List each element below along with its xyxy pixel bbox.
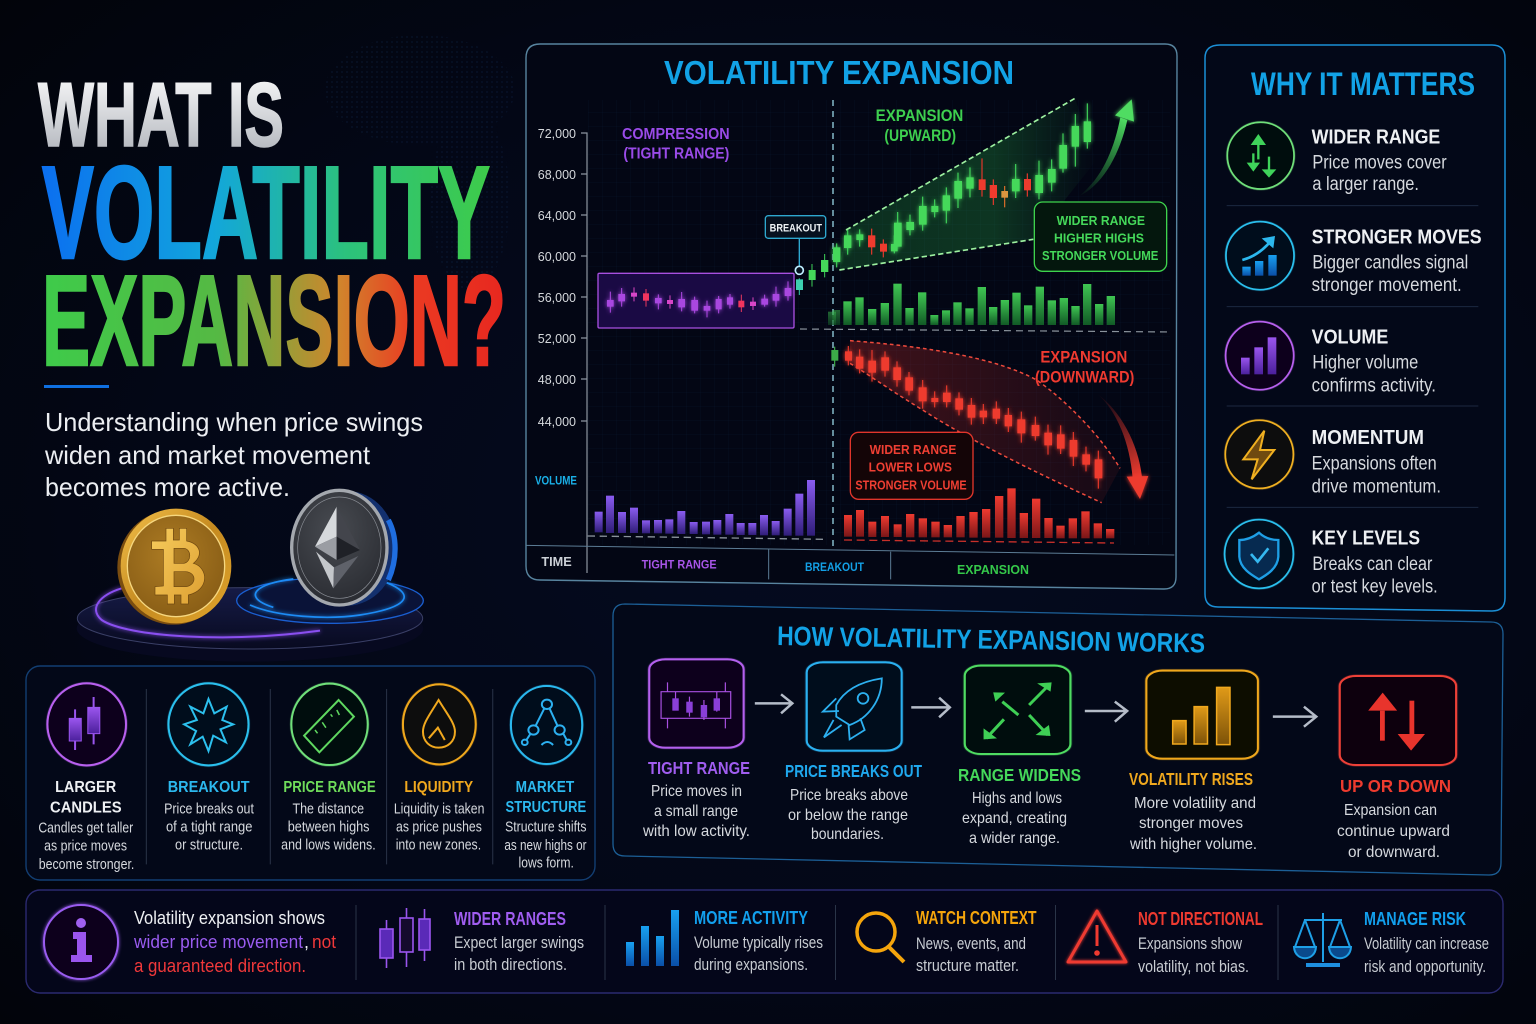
arrow: upward bbox=[1078, 99, 1134, 197]
arrow bbox=[755, 694, 792, 713]
callout: upward expansion: STRONGER VOLUME bbox=[1042, 248, 1158, 263]
price axis: 44,000 bbox=[538, 415, 576, 429]
expansion down label: (DOWNWARD) bbox=[1035, 369, 1134, 387]
item: wider range: Price moves cover bbox=[1312, 152, 1447, 173]
callout: upward expansion: WIDER RANGE bbox=[1057, 213, 1145, 228]
subtitle: becomes more active. bbox=[45, 472, 290, 502]
step 1 text: Price moves in bbox=[651, 783, 742, 800]
step 5 text bbox=[1337, 776, 1451, 861]
subtitle: Understanding when price swings bbox=[45, 407, 423, 437]
price axis bbox=[538, 127, 587, 573]
step 1 text: a small range bbox=[654, 803, 738, 820]
item: key levels: KEY LEVELS bbox=[1312, 527, 1420, 550]
takeaway: wider ranges: in both directions. bbox=[454, 956, 567, 974]
concept: market structure: as new highs or bbox=[504, 838, 587, 854]
item: volume: Higher volume bbox=[1312, 353, 1418, 374]
arrow bbox=[1085, 702, 1127, 722]
concept: liquidity: into new zones. bbox=[396, 837, 481, 853]
icon: bitcoin coin bbox=[117, 509, 231, 625]
step 1 text: TIGHT RANGE bbox=[648, 758, 750, 778]
step 3 text: a wider range. bbox=[969, 830, 1060, 847]
volume and time axis: EXPANSION bbox=[957, 563, 1029, 577]
volume and time axis: TIGHT RANGE bbox=[642, 557, 717, 571]
item: stronger moves: STRONGER MOVES bbox=[1312, 226, 1482, 249]
step 5 text: or downward. bbox=[1348, 844, 1440, 861]
price axis: 72,000 bbox=[538, 127, 576, 141]
price axis: 68,000 bbox=[538, 168, 576, 182]
concept: market structure: STRUCTURE bbox=[505, 798, 586, 816]
step 5 text: Expansion can bbox=[1344, 802, 1437, 819]
item: stronger moves bbox=[1226, 222, 1482, 296]
takeaway: info note: a guaranteed direction. bbox=[134, 956, 306, 976]
breakout callout bbox=[765, 216, 826, 274]
takeaway: not directional: NOT DIRECTIONAL bbox=[1138, 909, 1263, 929]
takeaway: info note: not bbox=[312, 932, 336, 952]
step 3 text bbox=[958, 765, 1081, 847]
concept: price range: and lows widens. bbox=[281, 837, 376, 853]
step 3 text: RANGE WIDENS bbox=[958, 765, 1081, 785]
takeaway: not directional: volatility, not bias. bbox=[1138, 958, 1249, 976]
heading: how it works: HOW VOLATILITY EXPANSION WORKS bbox=[777, 621, 1205, 658]
takeaway: info note: , bbox=[304, 932, 309, 952]
step 4 text: VOLATILITY RISES bbox=[1129, 769, 1253, 789]
red pullback candles bbox=[868, 158, 1031, 257]
panel: why it matters bbox=[1205, 45, 1505, 611]
step 4 text: stronger moves bbox=[1139, 815, 1243, 832]
concept: price range: PRICE RANGE bbox=[283, 778, 376, 796]
concept: market structure: lows form. bbox=[519, 855, 574, 871]
price axis: 64,000 bbox=[538, 209, 576, 223]
item: volume bbox=[1226, 322, 1436, 397]
item: wider range: WIDER RANGE bbox=[1312, 126, 1440, 149]
callout: upward expansion: HIGHER HIGHS bbox=[1054, 231, 1144, 246]
concept: price range: between highs bbox=[288, 819, 370, 835]
icon: ethereum coin bbox=[292, 490, 397, 606]
takeaway: manage risk: MANAGE RISK bbox=[1364, 909, 1466, 929]
step 1 text bbox=[642, 758, 750, 840]
arrow: downward bbox=[1097, 393, 1148, 499]
item: key levels: Breaks can clear bbox=[1312, 554, 1432, 575]
callout: downward expansion: LOWER LOWS bbox=[869, 460, 952, 475]
step 2 text: Price breaks above bbox=[790, 787, 908, 804]
expansion up label bbox=[876, 107, 963, 145]
item: momentum: drive momentum. bbox=[1312, 476, 1441, 497]
panel: how volatility expansion works bbox=[613, 604, 1503, 875]
takeaway: watch context bbox=[857, 908, 1037, 975]
concept: breakout: BREAKOUT bbox=[168, 778, 250, 796]
icon: rocket bbox=[807, 662, 902, 751]
item: momentum bbox=[1225, 420, 1441, 497]
step 1 text: with low activity. bbox=[642, 823, 750, 840]
expansion up label: (UPWARD) bbox=[884, 127, 956, 145]
concept: breakout: of a tight range bbox=[166, 819, 253, 835]
takeaway: wider ranges: Expect larger swings bbox=[454, 934, 584, 952]
red candles bbox=[845, 346, 1102, 489]
compression label: (TIGHT RANGE) bbox=[623, 146, 729, 163]
item: wider range bbox=[1227, 122, 1447, 195]
step 2 text bbox=[785, 761, 922, 843]
takeaway: more activity: MORE ACTIVITY bbox=[694, 908, 808, 928]
item: volume: confirms activity. bbox=[1312, 376, 1436, 397]
title: WHAT IS bbox=[38, 65, 284, 166]
chart heading: VOLATILITY EXPANSION bbox=[664, 54, 1014, 91]
concept: larger candles: become stronger. bbox=[39, 857, 134, 873]
takeaway: manage risk: Volatility can increase bbox=[1364, 935, 1489, 953]
step 3 text: Highs and lows bbox=[972, 790, 1062, 807]
takeaway: more activity: Volume typically rises bbox=[694, 934, 823, 952]
icon: range widens bbox=[965, 666, 1070, 754]
title: VOLATILITY bbox=[42, 139, 490, 286]
takeaway: watch context: structure matter. bbox=[916, 957, 1019, 975]
step 4 text: with higher volume. bbox=[1129, 836, 1257, 853]
panel: volatility expansion chart bbox=[526, 44, 1177, 589]
concept: larger candles: Candles get taller bbox=[38, 820, 133, 836]
compression label: COMPRESSION bbox=[622, 126, 730, 143]
volume and time axis: BREAKOUT bbox=[805, 560, 864, 574]
concept: larger candles: LARGER bbox=[55, 778, 116, 796]
illustration: crypto coins on platform bbox=[77, 490, 423, 662]
expansion down label bbox=[1035, 349, 1134, 387]
takeaway: more activity: during expansions. bbox=[694, 956, 808, 974]
callout: downward expansion: STRONGER VOLUME bbox=[855, 477, 967, 492]
compression label bbox=[622, 126, 730, 163]
downward expansion bbox=[831, 341, 1148, 543]
subtitle bbox=[44, 407, 423, 502]
arrow bbox=[911, 698, 950, 717]
takeaway: watch context: News, events, and bbox=[916, 935, 1026, 953]
step 2 text: or below the range bbox=[788, 807, 908, 824]
takeaway: wider ranges: WIDER RANGES bbox=[454, 909, 566, 929]
title: EXPANSION? bbox=[42, 249, 506, 393]
price axis: 52,000 bbox=[538, 332, 576, 346]
panel: takeaways bbox=[26, 890, 1503, 993]
concept: liquidity: as price pushes bbox=[396, 819, 482, 835]
callout: downward expansion: WIDER RANGE bbox=[870, 442, 956, 457]
takeaway: wider ranges bbox=[380, 908, 584, 974]
item: wider range: a larger range. bbox=[1312, 174, 1419, 195]
concept: liquidity: Liquidity is taken bbox=[394, 801, 484, 817]
breakout candles bbox=[796, 254, 828, 295]
callout: upward expansion bbox=[1034, 202, 1167, 271]
breakout callout: BREAKOUT bbox=[770, 223, 822, 235]
concept: breakout: or structure. bbox=[175, 837, 243, 853]
item: stronger moves: Bigger candles signal bbox=[1312, 252, 1468, 273]
concept: price range: The distance bbox=[292, 801, 364, 817]
vertical breakout divider bbox=[832, 100, 834, 549]
concept: price range bbox=[281, 684, 376, 853]
price axis: 60,000 bbox=[538, 250, 576, 264]
concept: liquidity bbox=[394, 684, 484, 853]
expansion up label: EXPANSION bbox=[876, 107, 963, 125]
step 5 text: continue upward bbox=[1337, 823, 1450, 840]
item: momentum: Expansions often bbox=[1312, 453, 1437, 474]
compression zone with candles bbox=[598, 126, 828, 328]
item: volume: VOLUME bbox=[1312, 325, 1388, 348]
step 4 text bbox=[1129, 769, 1257, 853]
concept: larger candles bbox=[38, 683, 134, 873]
concept: larger candles: as price moves bbox=[44, 838, 127, 854]
volume and time axis bbox=[526, 474, 1174, 579]
concept: liquidity: LIQUIDITY bbox=[404, 778, 473, 796]
icon: up or down bbox=[1340, 676, 1456, 765]
concept: breakout: Price breaks out bbox=[164, 801, 254, 817]
arrow bbox=[1273, 707, 1316, 727]
item: key levels bbox=[1225, 520, 1438, 598]
green candles bbox=[833, 103, 1091, 267]
expansion down label: EXPANSION bbox=[1040, 349, 1127, 367]
heading: why it matters: WHY IT MATTERS bbox=[1251, 66, 1475, 102]
subtitle: widen and market movement bbox=[44, 440, 371, 470]
concept: market structure: Structure shifts bbox=[505, 819, 587, 835]
green volume bars bbox=[828, 284, 1115, 325]
upward expansion bbox=[828, 98, 1167, 325]
concept: larger candles: CANDLES bbox=[50, 798, 122, 816]
icon: tight range bbox=[649, 659, 744, 748]
takeaway: not directional bbox=[1068, 909, 1263, 976]
step 2 text: boundaries. bbox=[811, 826, 884, 843]
panel: key concepts bbox=[26, 666, 595, 880]
callout: downward expansion bbox=[850, 432, 973, 499]
price axis: 56,000 bbox=[538, 291, 576, 305]
step 2 text: PRICE BREAKS OUT bbox=[785, 761, 922, 781]
volume and time axis: TIME bbox=[541, 555, 572, 569]
item: momentum: MOMENTUM bbox=[1312, 426, 1424, 449]
concept: market structure: MARKET bbox=[516, 778, 575, 796]
takeaway: more activity bbox=[626, 908, 823, 974]
step 3 text: expand, creating bbox=[962, 810, 1067, 827]
price axis: 48,000 bbox=[538, 373, 576, 387]
takeaway: info note: Volatility expansion shows bbox=[134, 908, 325, 928]
takeaway: info note: wider price movement bbox=[133, 932, 303, 952]
volume and time axis: VOLUME bbox=[535, 474, 577, 487]
step 5 text: UP OR DOWN bbox=[1340, 776, 1451, 796]
takeaway: manage risk: risk and opportunity. bbox=[1364, 958, 1486, 976]
item: stronger moves: stronger movement. bbox=[1312, 275, 1462, 296]
title bbox=[38, 65, 506, 393]
red volume bars bbox=[844, 488, 1114, 538]
takeaway: manage risk bbox=[1294, 909, 1489, 976]
step 4 text: More volatility and bbox=[1134, 795, 1256, 812]
takeaway: not directional: Expansions show bbox=[1138, 935, 1242, 953]
takeaway: info note bbox=[44, 905, 336, 979]
item: key levels: or test key levels. bbox=[1312, 577, 1438, 598]
concept: breakout bbox=[164, 683, 254, 853]
step icons and arrows bbox=[649, 659, 1456, 765]
takeaway: watch context: WATCH CONTEXT bbox=[916, 908, 1037, 928]
concept: market structure bbox=[504, 686, 587, 871]
icon: volatility rises bbox=[1146, 671, 1258, 759]
